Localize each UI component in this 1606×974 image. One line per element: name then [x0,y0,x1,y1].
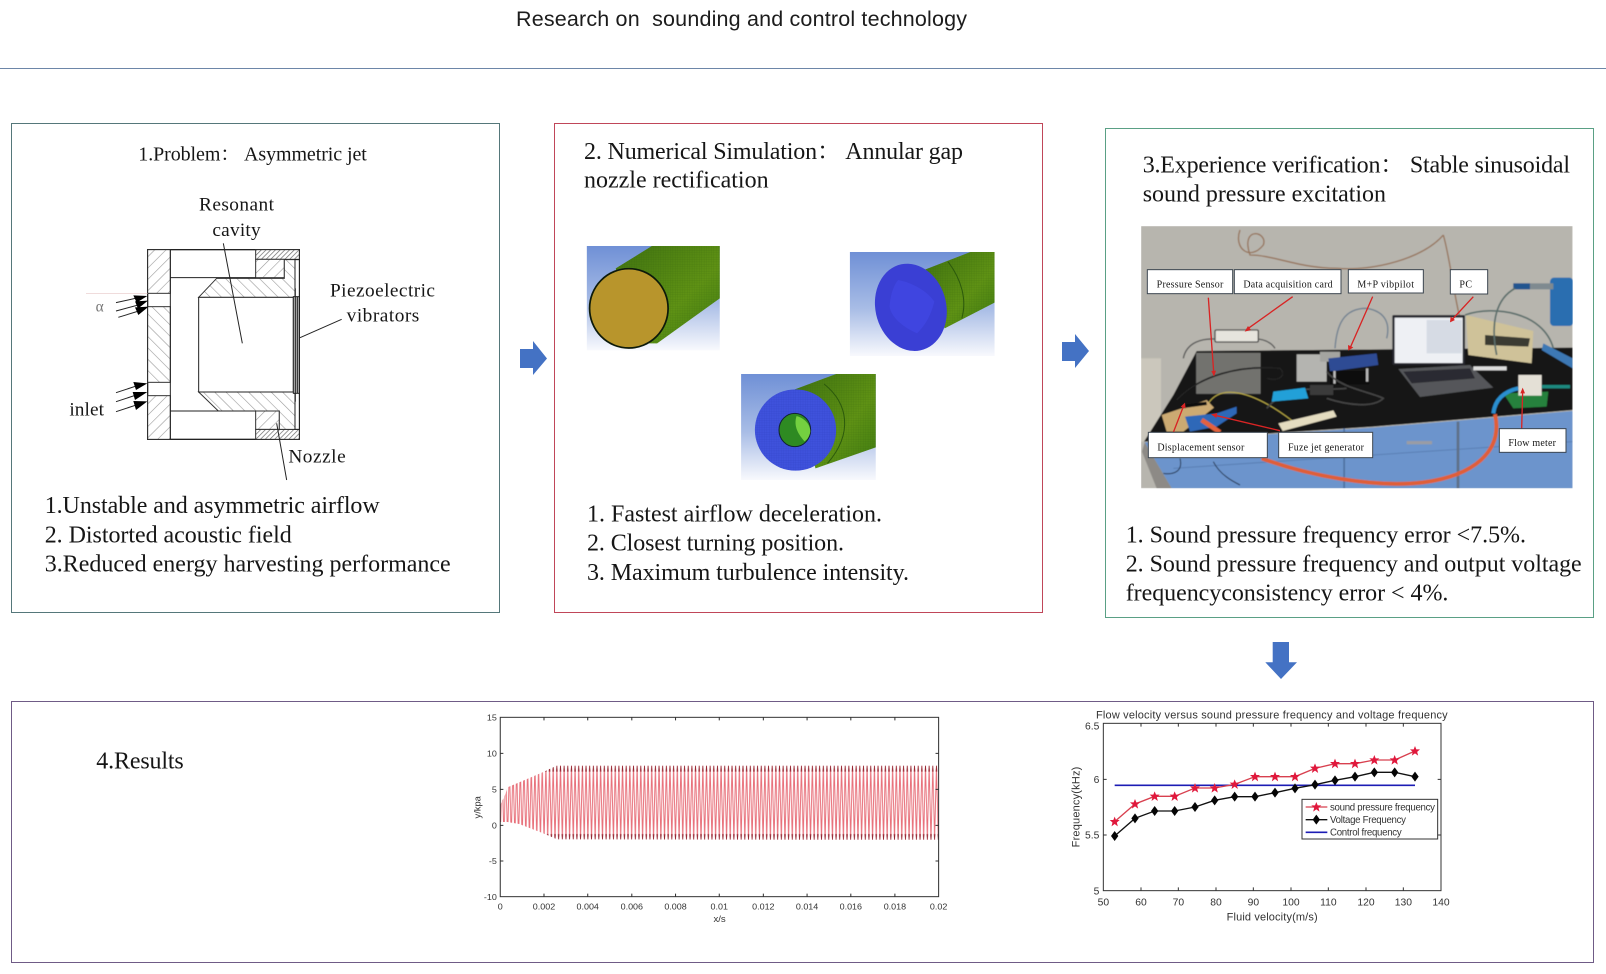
axis tick labels: 0 [498,901,503,911]
DAQ card [1215,330,1258,342]
labels: Nozzle [288,447,346,468]
chart: sound pressure waveform [472,713,947,925]
line: sound pressure frequency [1110,746,1420,826]
labels [69,195,435,468]
photo labels: Displacement sensor [1157,442,1245,453]
arrows: inlet flow [116,295,149,412]
title: Research on sounding and control technology [516,7,967,31]
text block: verification list: 2. Sound pressure frequency and output voltage [1126,552,1582,578]
axis tick labels: 100 [1282,898,1300,909]
heading: experience verification: sound pressure excitation [1143,182,1386,208]
axis tick labels: 130 [1395,898,1412,909]
labels: inlet [69,400,105,421]
text block: verification list: frequencyconsistency error < 4%. [1126,581,1448,607]
axis titles [1070,767,1318,924]
axis titles [472,795,726,925]
vibpilot [1328,353,1378,372]
chart: frequency vs velocity: 5 [1094,886,1100,897]
labels: Piezoelectric [330,281,435,302]
flow meter [1503,392,1548,408]
chart: sound pressure waveform: -10 [484,892,497,902]
axis tick labels: 50 [1098,898,1109,909]
axis tick labels: 110 [1320,898,1337,909]
panel: 1 problem [12,124,500,612]
photo labels: M+P vibpilot [1357,279,1414,290]
axis tick labels: 0.016 [840,901,862,911]
axis titles: Frequency(kHz) [1070,767,1082,847]
text block: simulation list: 1. Fastest airflow deceleration. [587,502,882,528]
chart: sound pressure waveform: 10 [487,748,497,758]
axis tick labels: 0.006 [621,901,643,911]
text block: simulation list [587,502,909,586]
text block: problem list: 3.Reduced energy harvesting performance [45,552,451,578]
orange hose [1262,414,1496,484]
photo labels: Flow meter [1508,438,1557,449]
waveform [500,763,939,843]
axis tick labels: 70 [1173,898,1184,909]
legend: sound pressure frequency [1330,803,1435,814]
axis tick labels: 0.014 [796,901,818,911]
chart: frequency vs velocity [1070,709,1450,924]
labels: Resonant [199,195,275,216]
arrow: panel 1 to 2 [520,341,547,375]
photo: test bench [1141,226,1573,488]
bench power box [1466,315,1533,363]
axis tick labels: 0.02 [930,901,947,911]
panel: 3 experiment [1106,128,1594,618]
labels: cavity [212,220,261,241]
axis tick labels: 90 [1248,898,1259,909]
meshes [587,246,995,480]
heading: numerical simulation: nozzle rectification [584,168,769,194]
axis tick labels: 120 [1357,898,1375,909]
axis tick labels: 60 [1135,898,1147,909]
axis tick labels: 0.008 [664,901,687,911]
axis tick labels: 0.01 [711,901,728,911]
axis tick labels: 0.018 [884,901,906,911]
line: voltage frequency [1111,767,1419,841]
wall cables [1238,230,1460,318]
chart: sound pressure waveform: 0 [492,820,497,830]
panel: 2 numerical simulation [554,124,1042,612]
photo labels: Fuze jet generator [1288,442,1365,453]
mesh image: annular gap [741,374,876,480]
axis titles: y/kpa [472,795,483,818]
heading: numerical simulation [584,139,963,194]
photo labels: PC [1459,279,1472,290]
text block: problem list: 1.Unstable and asymmetric airflow [45,493,380,519]
clear box [1197,353,1260,393]
power supply [1297,354,1327,382]
red arrows [1173,297,1525,432]
mesh image: flared nozzle [850,252,995,358]
legend: Control frequency [1330,828,1402,839]
arrow: panel 3 to 4 [1265,642,1297,679]
axis tick labels: 0.012 [752,901,775,911]
filter and gas line [1550,278,1573,326]
text block: verification list [1126,523,1582,607]
chart: sound pressure waveform: -5 [489,856,497,866]
mesh image: solid cylinder [587,246,720,350]
chart: frequency vs velocity: 5.5 [1085,831,1100,842]
chart: sound pressure waveform: 15 [487,713,497,723]
labels: α [96,298,104,315]
heading: numerical simulation: 2. Numerical Simulation： Annular gap [584,139,963,165]
axis titles: x/s [713,914,726,925]
photo labels: Data acquisition card [1243,279,1333,290]
text block: verification list: 1. Sound pressure frequency error <7.5%. [1126,523,1526,549]
legend [1302,799,1438,839]
blue bag [1272,388,1308,402]
heading: experience verification [1143,153,1570,208]
axis tick labels [498,901,947,911]
breadboard [1278,410,1337,431]
photo labels: Pressure Sensor [1157,279,1224,290]
text block: problem list: 2. Distorted acoustic field [45,522,292,548]
heading: results: 4.Results [96,748,184,774]
heading: experience verification: 3.Experience verification： Stable sinusoidal [1143,153,1570,179]
sensor fixture [1162,400,1214,432]
legend: Voltage Frequency [1330,815,1406,826]
labels: vibrators [347,306,419,327]
leader lines [223,243,342,480]
axis tick labels [1098,898,1450,909]
axis tick labels: 140 [1432,898,1450,909]
axis tick labels: 80 [1210,898,1222,909]
heading: problem: 1.Problem： Asymmetric jet [138,144,367,166]
diagram: resonator cross-section [69,195,435,480]
axis tick labels: 0.004 [577,901,599,911]
text block: simulation list: 3. Maximum turbulence intensity. [587,560,909,586]
text block: problem list [45,493,451,578]
photo labels [1147,270,1566,458]
axis titles: Fluid velocity(m/s) [1227,912,1318,924]
chart: sound pressure waveform: 5 [492,784,497,794]
chart title: Flow velocity versus sound pressure frequency and voltage frequency [1096,709,1448,721]
chart: frequency vs velocity: 6 [1094,775,1100,786]
text block: simulation list: 2. Closest turning position. [587,531,844,557]
line: control frequency [1115,783,1415,788]
panel: 4 results [12,702,1594,962]
axis tick labels: 0.002 [533,901,555,911]
laptop [1392,315,1465,365]
chart: frequency vs velocity: 6.5 [1085,721,1100,732]
arrow: panel 2 to 3 [1062,334,1089,368]
